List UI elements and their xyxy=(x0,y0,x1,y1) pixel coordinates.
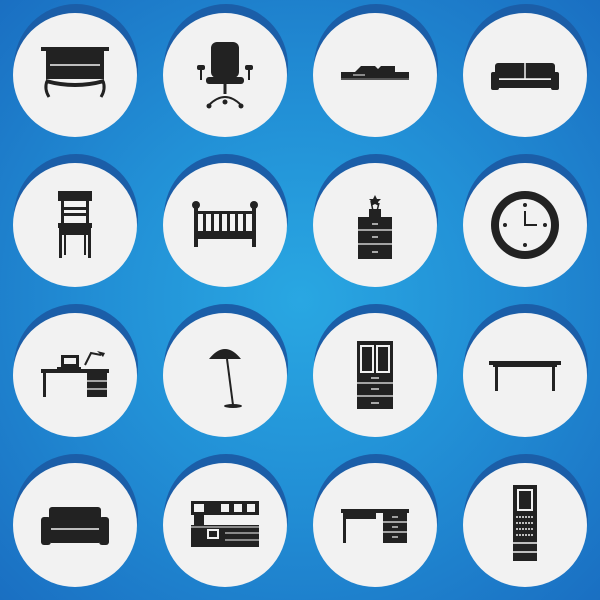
icon: cupboard xyxy=(313,304,438,437)
icon: kitchen xyxy=(163,454,288,587)
icon: office chair xyxy=(163,4,288,137)
icon: bed xyxy=(313,4,438,137)
icon: floor lamp xyxy=(163,304,288,437)
icon: office desk xyxy=(313,454,438,587)
icon: armchair sofa xyxy=(13,454,138,587)
icon: computer desk xyxy=(13,304,138,437)
icon: clock xyxy=(463,154,588,287)
icon: nightstand xyxy=(313,154,438,287)
icon: table xyxy=(463,304,588,437)
icon: wooden chair xyxy=(13,154,138,287)
icon: tall cabinet xyxy=(463,454,588,587)
icon: crib xyxy=(163,154,288,287)
icon: dresser xyxy=(13,4,138,137)
icon: sofa xyxy=(463,4,588,137)
